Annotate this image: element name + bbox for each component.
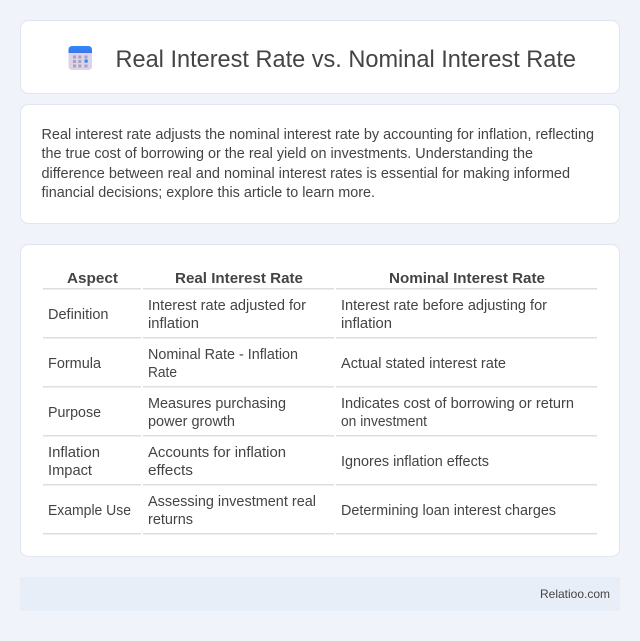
table row: purpose: Measures purchasing bbox=[148, 396, 286, 412]
table row: example use: Determining loan interest charges bbox=[341, 503, 556, 519]
table row: example use: returns bbox=[148, 512, 193, 528]
table row: inflation impact: Accounts for inflation bbox=[148, 445, 286, 461]
table row: definition: inflation bbox=[148, 316, 199, 332]
table header: Aspect bbox=[67, 270, 118, 287]
text block: introduction paragraph: difference between real and nominal interest rates is essential for making informed bbox=[42, 166, 570, 182]
table header: Real Interest Rate bbox=[175, 270, 303, 287]
table row: purpose: on investment bbox=[341, 414, 427, 430]
title: Real Interest Rate vs. Nominal Interest Rate bbox=[116, 46, 576, 73]
table row: definition: Definition bbox=[48, 307, 108, 323]
table row: purpose bbox=[48, 396, 574, 430]
table row: formula: Nominal Rate - Inflation bbox=[148, 347, 298, 363]
table row: definition: Interest rate adjusted for bbox=[148, 298, 306, 314]
table row: purpose: Purpose bbox=[48, 405, 101, 421]
table row: formula: Formula bbox=[48, 356, 101, 372]
text block: introduction paragraph: the true cost of borrowing or the real yield on investments. Understanding the bbox=[42, 146, 533, 162]
table row: formula: Actual stated interest rate bbox=[341, 356, 506, 372]
table row: definition bbox=[48, 298, 547, 332]
panel: comparison table bbox=[20, 244, 620, 556]
table row: inflation impact bbox=[48, 445, 489, 479]
table header: Nominal Interest Rate bbox=[389, 270, 545, 287]
table row: example use bbox=[48, 494, 556, 528]
panel: introduction bbox=[20, 104, 620, 224]
table row: inflation impact: effects bbox=[148, 463, 193, 479]
table row: formula: Rate bbox=[148, 365, 177, 381]
text block: introduction paragraph bbox=[42, 127, 594, 201]
table row: example use: Example Use bbox=[48, 503, 131, 519]
text block: introduction paragraph: Real interest rate adjusts the nominal interest rate by accounting for inflation, reflecting bbox=[42, 127, 594, 143]
table row: definition: inflation bbox=[341, 316, 392, 332]
panel: title card bbox=[20, 20, 620, 94]
text block: introduction paragraph: financial decisions; explore this article to learn more. bbox=[42, 185, 375, 201]
table row: purpose: power growth bbox=[148, 414, 235, 430]
table row: formula bbox=[48, 347, 506, 381]
icon: calendar bbox=[68, 46, 92, 70]
footer bbox=[20, 577, 620, 611]
table row: inflation impact: Impact bbox=[48, 463, 92, 479]
footer: Relatioo.com bbox=[540, 587, 610, 601]
table row: purpose: Indicates cost of borrowing or return bbox=[341, 396, 574, 412]
table row: definition: Interest rate before adjusting for bbox=[341, 298, 547, 314]
table row: inflation impact: Ignores inflation effects bbox=[341, 454, 489, 470]
table header bbox=[67, 270, 545, 287]
table row: example use: Assessing investment real bbox=[148, 494, 316, 510]
table row: inflation impact: Inflation bbox=[48, 445, 100, 461]
